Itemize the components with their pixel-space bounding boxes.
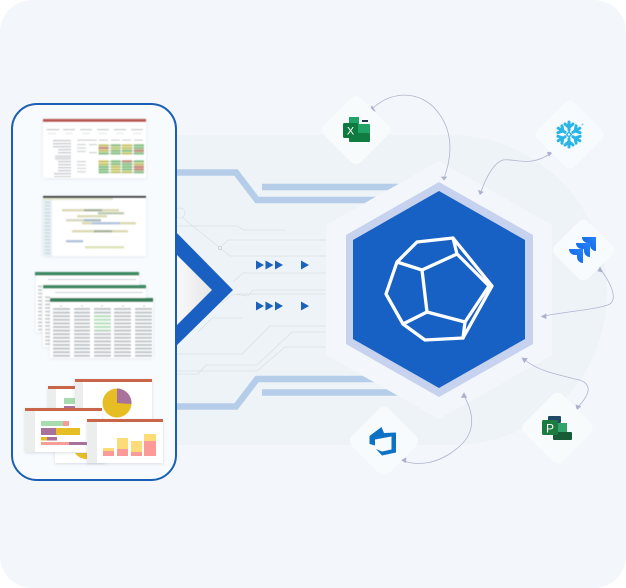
tile <box>550 217 617 283</box>
back-bottom slide <box>55 440 105 463</box>
sheet <box>43 119 146 178</box>
arrow: Jira to hub <box>542 267 613 318</box>
panel frame <box>12 104 176 480</box>
data columns <box>53 308 70 357</box>
icon tile: Azure DevOps <box>347 404 421 478</box>
stacked bars <box>41 421 63 426</box>
row labels <box>53 140 71 177</box>
central hexagon hub <box>326 161 552 419</box>
thumbnail: spreadsheet stack <box>35 272 153 358</box>
front sheet <box>50 298 153 358</box>
snowflake mark <box>556 122 582 147</box>
top light-blue bus <box>176 172 420 200</box>
icon tile: Jira <box>550 217 617 283</box>
X badge <box>343 123 358 138</box>
red header <box>43 119 146 122</box>
middle sheet <box>43 285 146 347</box>
pie sliver <box>75 453 88 459</box>
circuit connectors <box>175 172 420 406</box>
heat cells <box>98 144 144 174</box>
column slide <box>87 419 163 463</box>
column headers <box>60 306 145 307</box>
tile <box>533 98 607 171</box>
kpi cards <box>46 129 143 134</box>
trace node <box>218 246 222 250</box>
background hub glow shape <box>176 135 607 445</box>
arrow: Excel to hub <box>370 95 450 180</box>
lower arrow row <box>256 302 309 310</box>
mid columns <box>77 140 143 173</box>
upper arrow row <box>256 260 309 270</box>
bottom light-blue bus <box>176 379 420 406</box>
icon tile: Excel: X <box>347 126 355 138</box>
dash <box>362 120 368 122</box>
blue hexagon <box>353 191 525 388</box>
thumbnail: heatmap table <box>43 119 146 178</box>
pie chart slide <box>75 379 152 421</box>
bar slide <box>25 408 102 452</box>
lavender hexagon ring <box>346 182 533 397</box>
gantt bars <box>62 209 136 248</box>
azure devops mark <box>370 427 396 456</box>
arrow: Snowflake to hub <box>478 152 552 194</box>
icon tile: Excel <box>319 93 393 167</box>
icon tile: Microsoft Project <box>519 390 596 466</box>
back sheet <box>35 272 139 332</box>
icon tile: Microsoft Project: P <box>546 422 554 436</box>
icon tile: Snowflake <box>533 98 607 171</box>
curved connector arrows <box>370 95 613 463</box>
flow arrowheads <box>256 260 309 310</box>
icon: dodecahedron <box>386 238 492 340</box>
stacked columns <box>103 448 114 451</box>
tile <box>347 404 421 478</box>
arrow: Azure to hub <box>402 393 472 463</box>
sheet <box>43 196 146 256</box>
tile <box>519 390 596 466</box>
thin circuit traces <box>175 208 326 374</box>
arrow: Project to hub <box>522 358 588 410</box>
jira mark <box>569 237 596 263</box>
chevron blue <box>172 228 233 350</box>
chevron inner triangle <box>172 250 212 330</box>
outer pale hexagon <box>326 161 552 419</box>
tile <box>319 93 393 167</box>
large chevron arrow <box>172 228 233 350</box>
back-left slide <box>48 386 78 416</box>
pie <box>102 388 132 418</box>
thumbnail: dashboard slides <box>25 379 163 463</box>
left panel: report stack <box>12 104 176 480</box>
dark header <box>43 196 146 198</box>
sheet <box>349 117 359 125</box>
project blocks <box>548 416 561 423</box>
sidebar <box>43 200 52 256</box>
thumbnail: gantt chart <box>43 196 146 256</box>
